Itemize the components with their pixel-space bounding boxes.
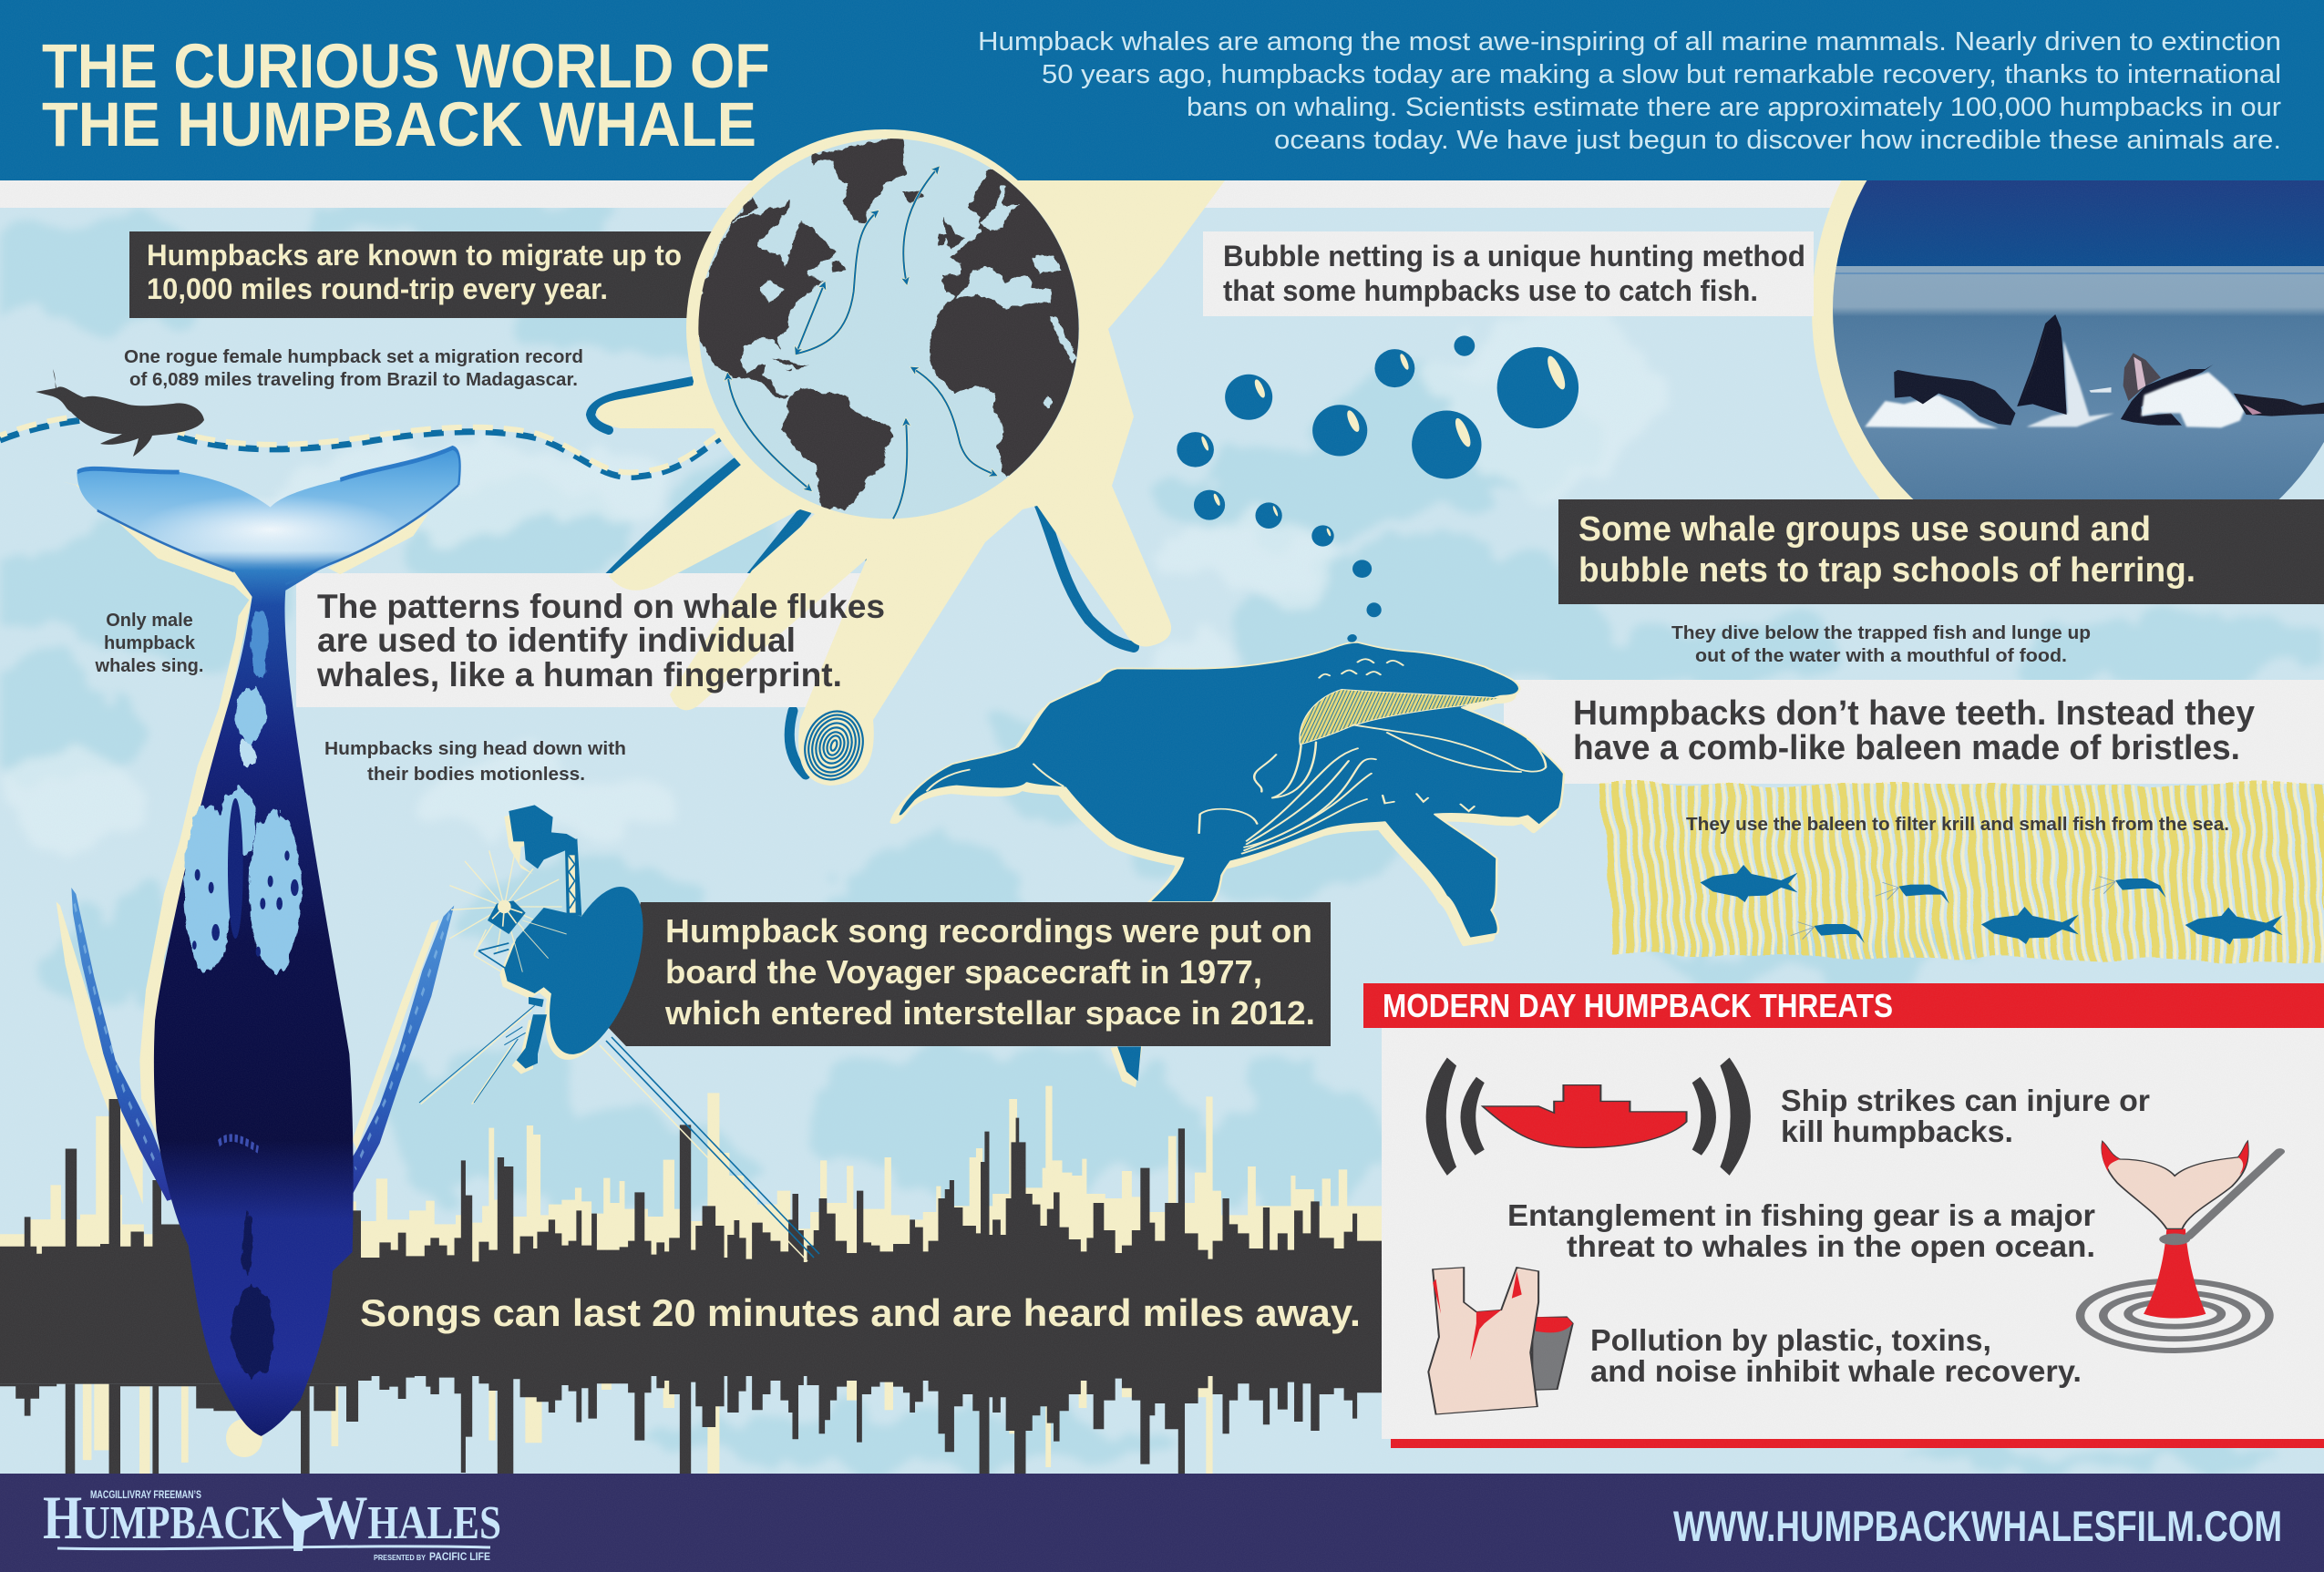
boom and truss bbox=[565, 838, 581, 916]
logo: Humpback Whales film: PRESENTED BY bbox=[374, 1553, 426, 1562]
right flipper bbox=[328, 906, 454, 1207]
text: only male whales sing: Only male bbox=[106, 611, 193, 631]
text: only male whales sing: whales sing. bbox=[95, 656, 203, 676]
title: THE HUMPBACK WHALE bbox=[42, 89, 756, 159]
voyager halo bbox=[499, 810, 658, 1074]
icon: krill bbox=[1791, 922, 1865, 943]
dish bbox=[530, 875, 663, 1066]
icon: krill bbox=[2092, 877, 2165, 898]
icon: fish bbox=[2185, 908, 2283, 945]
chart: song waveform bbox=[0, 1086, 1383, 1474]
intro text: oceans today. We have just begun to discover how incredible these animals are. bbox=[1274, 126, 2281, 155]
logo: Humpback Whales film bbox=[43, 1483, 501, 1563]
text: sing head down: Humpbacks sing head down with bbox=[324, 739, 626, 759]
white box: flukes panel bbox=[296, 573, 881, 707]
panel: some whale groups bbox=[1558, 499, 2324, 604]
text: they dive below: out of the water with a mouthful of food. bbox=[1695, 646, 2067, 666]
text: fluke patterns: are used to identify individual bbox=[317, 622, 796, 659]
intro text bbox=[978, 27, 2281, 155]
text: bubble netting: Bubble netting is a unique hunting method bbox=[1223, 240, 1805, 272]
baleen bristles with fish and krill bbox=[1599, 784, 2324, 962]
whale halo bbox=[892, 649, 1558, 944]
text: they dive below bbox=[1671, 623, 2091, 666]
magnetometer boom lines bbox=[600, 1037, 819, 1261]
text: migration record: One rogue female humpback set a migration record bbox=[124, 347, 583, 367]
logo: Humpback Whales film: PACIFIC LIFE bbox=[429, 1550, 490, 1563]
land: North America bbox=[693, 198, 836, 398]
text: migration record bbox=[124, 347, 583, 390]
panel: modern day humpback threats bbox=[1363, 983, 2324, 1448]
text: fluke patterns: whales, like a human fingerprint. bbox=[316, 656, 842, 694]
land: Europe, Asia and Africa bbox=[930, 158, 1100, 478]
instruments bbox=[509, 805, 577, 868]
text: pollution bbox=[1590, 1323, 2082, 1388]
photo: lunge feeding humpbacks with cream halo bbox=[1812, 180, 2324, 499]
text: no teeth bbox=[1573, 694, 2255, 767]
whale body bbox=[77, 447, 460, 1436]
text: pollution: Pollution by plastic, toxins, bbox=[1590, 1323, 1991, 1357]
whale D bbox=[2121, 365, 2213, 426]
text: migration callout: 10,000 miles round-trip every year. bbox=[147, 272, 608, 305]
text: ship strikes bbox=[1781, 1084, 2150, 1148]
whale E bbox=[2234, 394, 2324, 416]
text: they dive below: They dive below the trapped fish and lunge up bbox=[1671, 623, 2091, 643]
cream halo of diving whale bbox=[57, 482, 439, 1457]
panel: voyager callout bbox=[606, 902, 1331, 1046]
text: fluke patterns: The patterns found on whale flukes bbox=[317, 588, 885, 625]
land: Greenland bbox=[811, 137, 905, 223]
photo: diving humpback singing head down bbox=[71, 447, 460, 1436]
whale A bbox=[1894, 370, 2015, 426]
logo: Humpback Whales film: MACGILLIVRAY FREEMAN’S bbox=[90, 1490, 201, 1501]
logo: Humpback Whales film: WHALES bbox=[316, 1483, 501, 1552]
panel: some whale groups: Some whale groups use sound and bbox=[1578, 510, 2151, 549]
icon: fish bbox=[1981, 907, 2079, 944]
routes bbox=[727, 167, 996, 519]
text: bubble netting bbox=[1203, 231, 1814, 316]
left flipper bbox=[71, 888, 178, 1201]
bottom rule bbox=[1391, 1439, 2324, 1448]
title: THE CURIOUS WORLD OF bbox=[42, 31, 770, 101]
fluke edge bbox=[77, 447, 460, 485]
footer band bbox=[0, 1474, 2324, 1572]
icon: fingerprint on fingertip bbox=[797, 704, 871, 787]
text: only male whales sing: humpback bbox=[104, 633, 196, 653]
text: ship strikes: kill humpbacks. bbox=[1781, 1115, 2013, 1148]
text: sing head down: their bodies motionless. bbox=[367, 765, 585, 785]
ventral pleats bbox=[232, 1214, 275, 1377]
threats heading bbox=[1363, 983, 2324, 1028]
splash bbox=[1865, 395, 1999, 428]
icon: logo tail bbox=[283, 1497, 328, 1551]
text: migration callout: Humpbacks are known to migrate up to bbox=[147, 239, 682, 272]
text: bubble netting: that some humpbacks use to catch fish. bbox=[1223, 274, 1758, 307]
panel: voyager callout: board the Voyager spacecraft in 1977, bbox=[665, 953, 1262, 991]
sun rays over body bbox=[513, 920, 567, 972]
text: songs last 20 minutes: Songs can last 20 minutes and are heard miles away. bbox=[360, 1291, 1361, 1334]
migration dashed path bbox=[0, 416, 720, 478]
mouth C bbox=[2123, 353, 2161, 401]
illustration: humpback whale with open mouth bbox=[892, 635, 1564, 1087]
title bbox=[42, 31, 770, 159]
logo: Humpback Whales film: HUMPBACK bbox=[43, 1483, 282, 1552]
icon: small whale silhouette bbox=[36, 369, 204, 457]
land: South America bbox=[782, 387, 893, 510]
white strip under header bbox=[0, 180, 1914, 208]
skin patches bbox=[184, 610, 301, 971]
text: entanglement bbox=[1507, 1198, 2095, 1263]
text: no teeth: Humpbacks don’t have teeth. Instead they bbox=[1573, 694, 2255, 733]
struts bbox=[478, 943, 509, 971]
text: ship strikes: Ship strikes can injure or bbox=[1781, 1084, 2150, 1117]
intro text: Humpback whales are among the most awe-inspiring of all marine mammals. Nearly driven to extinction bbox=[978, 27, 2281, 57]
text: migration callout bbox=[129, 231, 713, 318]
panel: some whale groups: bubble nets to trap schools of herring. bbox=[1578, 551, 2195, 590]
icon: entangled tail bbox=[2081, 1142, 2280, 1351]
text: only male whales sing bbox=[95, 611, 203, 676]
icon: krill bbox=[1876, 882, 1949, 904]
intro text: bans on whaling. Scientists estimate there are approximately 100,000 humpbacks in our bbox=[1187, 93, 2281, 122]
panel: voyager callout: which entered interstellar space in 2012. bbox=[664, 994, 1315, 1032]
mouth B bbox=[2017, 314, 2067, 415]
text: baleen filter: They use the baleen to filter krill and small fish from the sea. bbox=[1686, 815, 2229, 835]
fluke glow bbox=[137, 495, 404, 565]
sunburst bbox=[449, 850, 567, 972]
seas bbox=[702, 185, 1077, 366]
threats heading: MODERN DAY HUMPBACK THREATS bbox=[1383, 987, 1893, 1024]
globe with migration routes bbox=[686, 129, 1100, 527]
text: entanglement: Entanglement in fishing gear is a major bbox=[1507, 1198, 2095, 1232]
icon: ship with sound waves bbox=[1426, 1058, 1751, 1176]
icon: voyager spacecraft bbox=[419, 805, 663, 1105]
header band bbox=[0, 0, 2324, 180]
whale line details bbox=[927, 659, 1546, 854]
waveform left section bbox=[0, 1099, 353, 1474]
icon: fish bbox=[1701, 865, 1797, 902]
white band: baleen panel bbox=[1504, 680, 2324, 784]
baleen bbox=[1300, 689, 1503, 745]
intro text: 50 years ago, humpbacks today are making a slow but remarkable recovery, thanks to international bbox=[1042, 60, 2281, 89]
text: no teeth: have a comb-like baleen made of bristles. bbox=[1573, 729, 2240, 767]
waveform right section bbox=[346, 1086, 1383, 1474]
text: migration record: of 6,089 miles traveling from Brazil to Madagascar. bbox=[129, 370, 578, 390]
text: sing head down bbox=[324, 739, 626, 785]
icon: plastic bag and cup bbox=[1428, 1268, 1573, 1414]
text: pollution: and noise inhibit whale recovery. bbox=[1590, 1354, 2082, 1388]
cream hand holding the globe bbox=[596, 180, 1225, 786]
land: islands bbox=[772, 190, 964, 371]
bubbles bbox=[1177, 335, 1578, 642]
panel: voyager callout: Humpback song recordings were put on bbox=[665, 912, 1312, 950]
finger shadows bbox=[591, 381, 1134, 775]
text: entanglement: threat to whales in the open ocean. bbox=[1567, 1229, 2095, 1263]
text: fluke patterns bbox=[316, 588, 885, 694]
